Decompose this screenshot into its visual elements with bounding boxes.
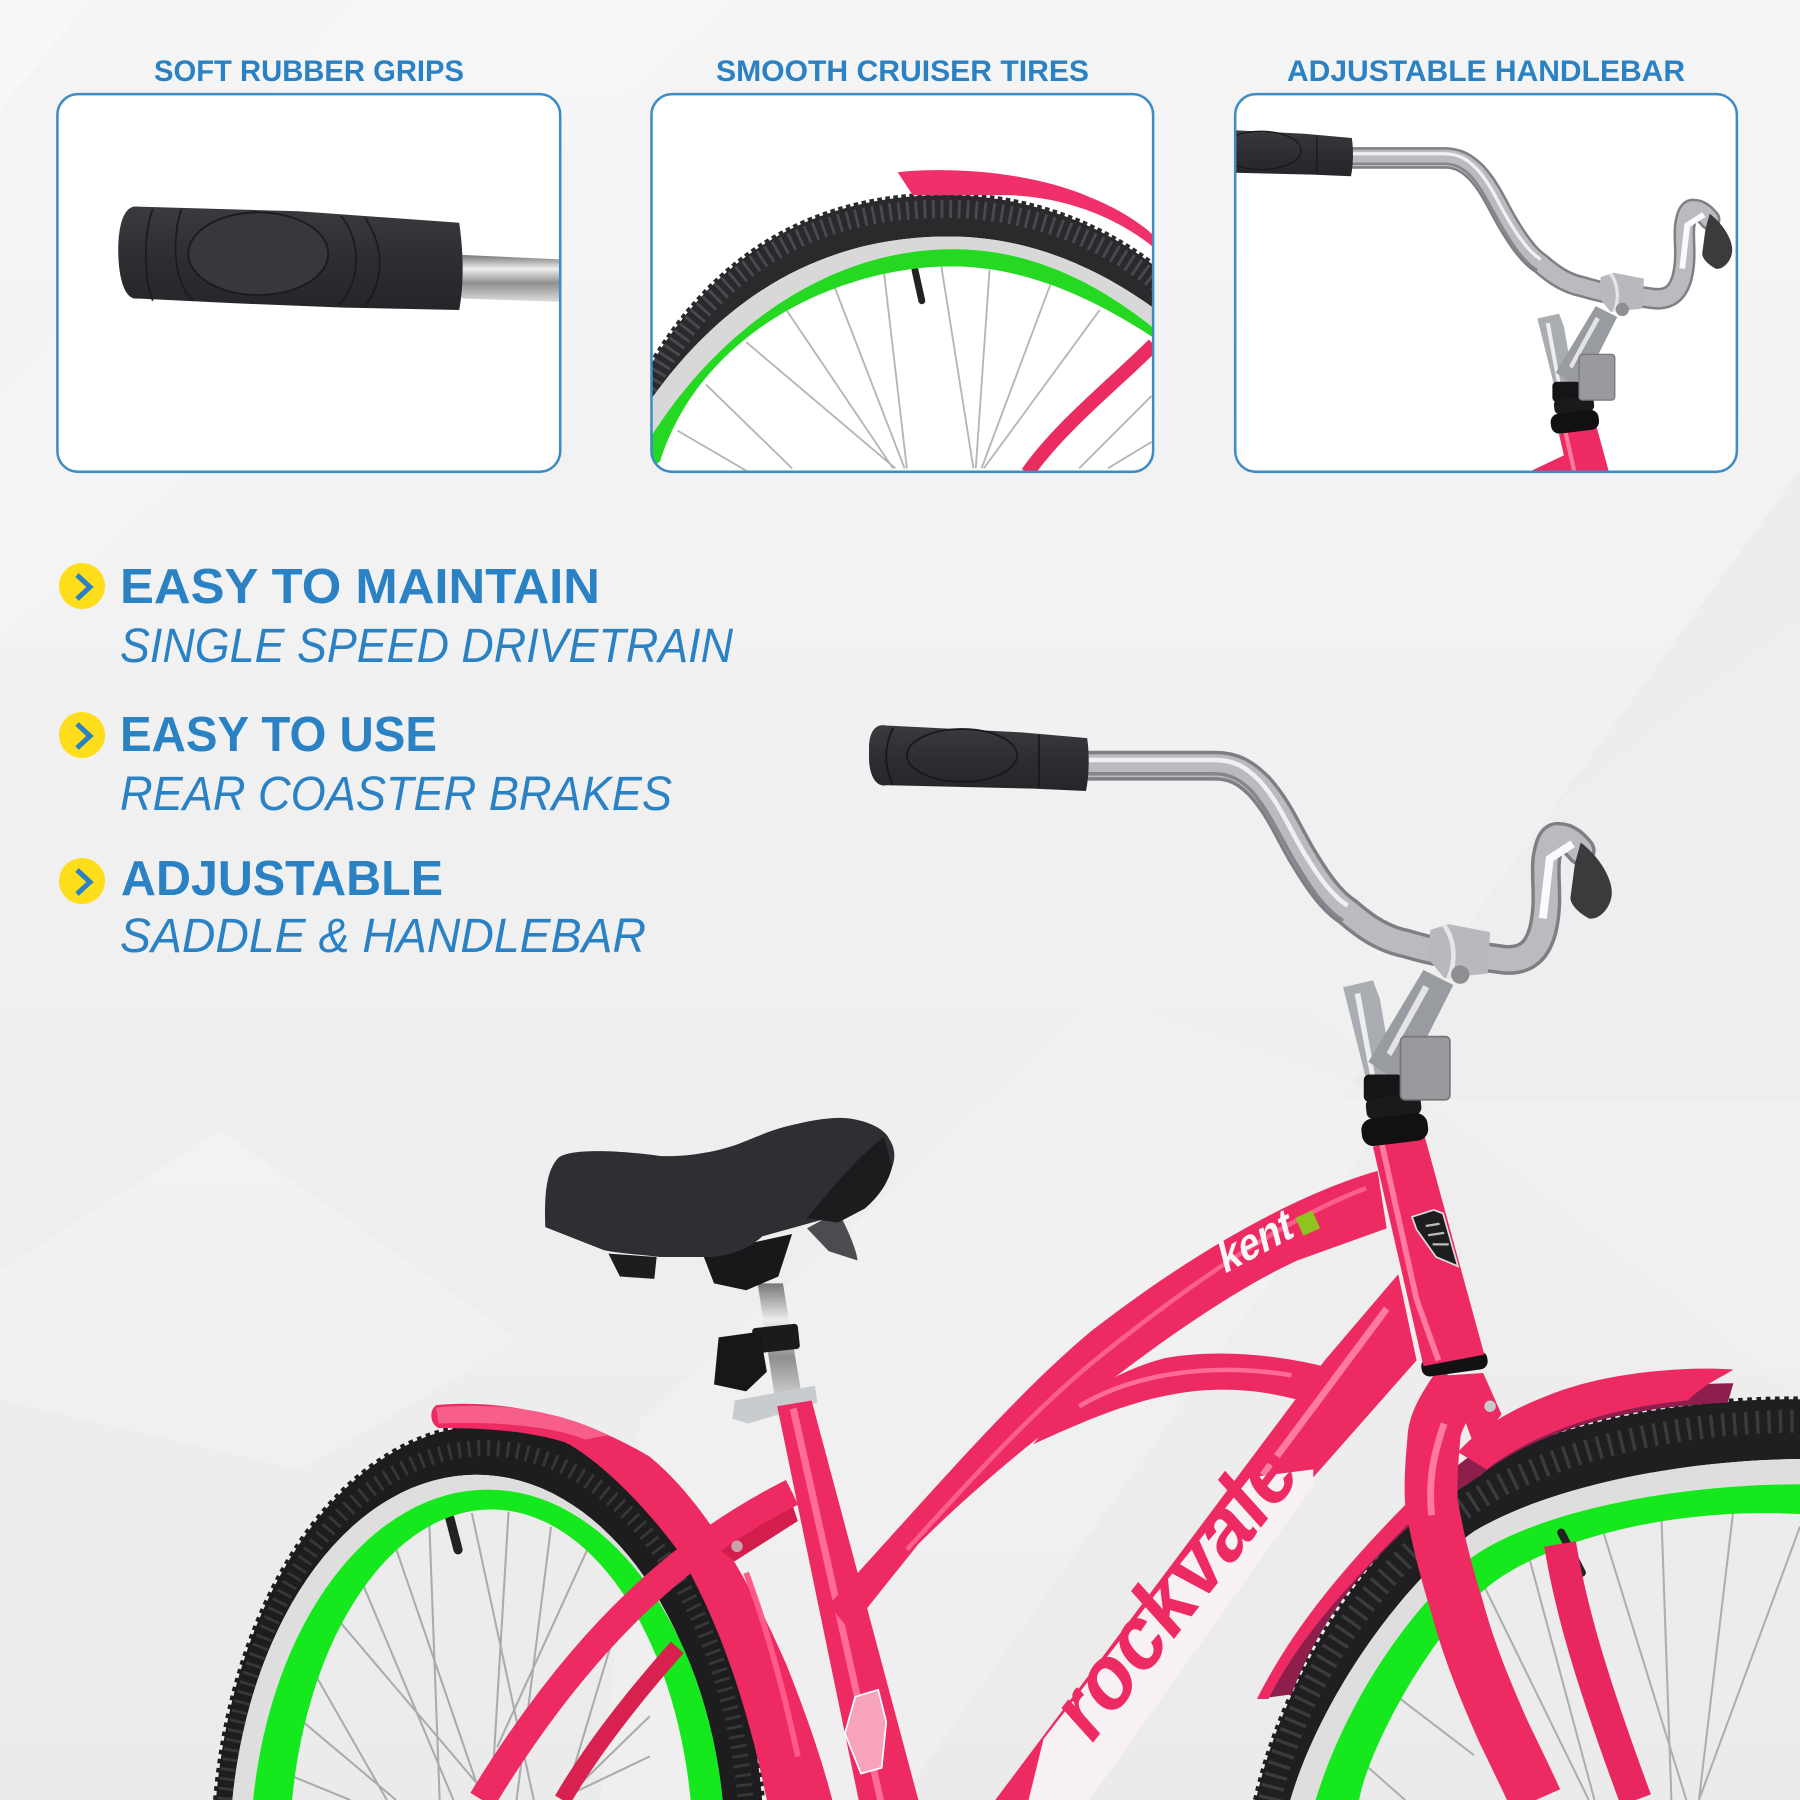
feature: easy to maintain <box>59 560 733 673</box>
feature: easy to use: REAR COASTER BRAKES <box>120 768 672 821</box>
feature list <box>59 560 733 963</box>
feature: easy to use: EASY TO USE <box>120 708 437 762</box>
panel: adjustable handlebar <box>1234 60 1738 474</box>
lower arc tube <box>1033 1353 1322 1444</box>
feature: adjustable: SADDLE & HANDLEBAR <box>120 910 646 963</box>
top tube <box>829 1171 1387 1630</box>
feature: easy to use <box>59 708 672 821</box>
front wheel <box>1256 1399 1800 1800</box>
rear fender and stays <box>431 1404 832 1800</box>
icon: yellow chevron bullet <box>59 712 105 758</box>
text: rockvale: rockvale <box>1035 1417 1314 1761</box>
photo: rubber grip close-up <box>57 94 563 472</box>
heading: adjustable handlebar: ADJUSTABLE HANDLEBAR <box>1287 55 1685 88</box>
feature: easy to maintain: SINGLE SPEED DRIVETRAIN <box>120 620 733 673</box>
head badge <box>1412 1210 1458 1266</box>
down tube <box>995 1274 1417 1800</box>
bicycle photo <box>216 725 1800 1800</box>
front fender and fork <box>1257 1350 1733 1800</box>
logo: size tag <box>1295 1210 1320 1236</box>
saddle and seat post <box>545 1118 894 1423</box>
panel: smooth cruiser tires <box>643 55 1159 473</box>
heading: soft rubber grips: SOFT RUBBER GRIPS <box>154 55 464 88</box>
rear wheel <box>216 1425 762 1800</box>
seat tube <box>777 1401 918 1800</box>
feature: easy to maintain: EASY TO MAINTAIN <box>120 560 600 614</box>
bicycle frame <box>829 1171 1417 1800</box>
icon: yellow chevron bullet <box>59 858 105 904</box>
heading: smooth cruiser tires: SMOOTH CRUISER TIRES <box>716 55 1089 88</box>
photo: handlebar close-up <box>1234 92 1738 474</box>
panel: soft rubber grips <box>57 55 563 472</box>
feature: adjustable: ADJUSTABLE <box>121 852 443 906</box>
decal: white band <box>1029 1469 1313 1800</box>
badge: frame crest <box>845 1690 886 1774</box>
photo: tire close-up <box>643 94 1159 473</box>
text: kent: kent <box>1214 1198 1297 1284</box>
feature: adjustable <box>59 852 646 963</box>
icon: yellow chevron bullet <box>59 563 105 609</box>
handlebar, stem and head tube <box>869 725 1612 1366</box>
